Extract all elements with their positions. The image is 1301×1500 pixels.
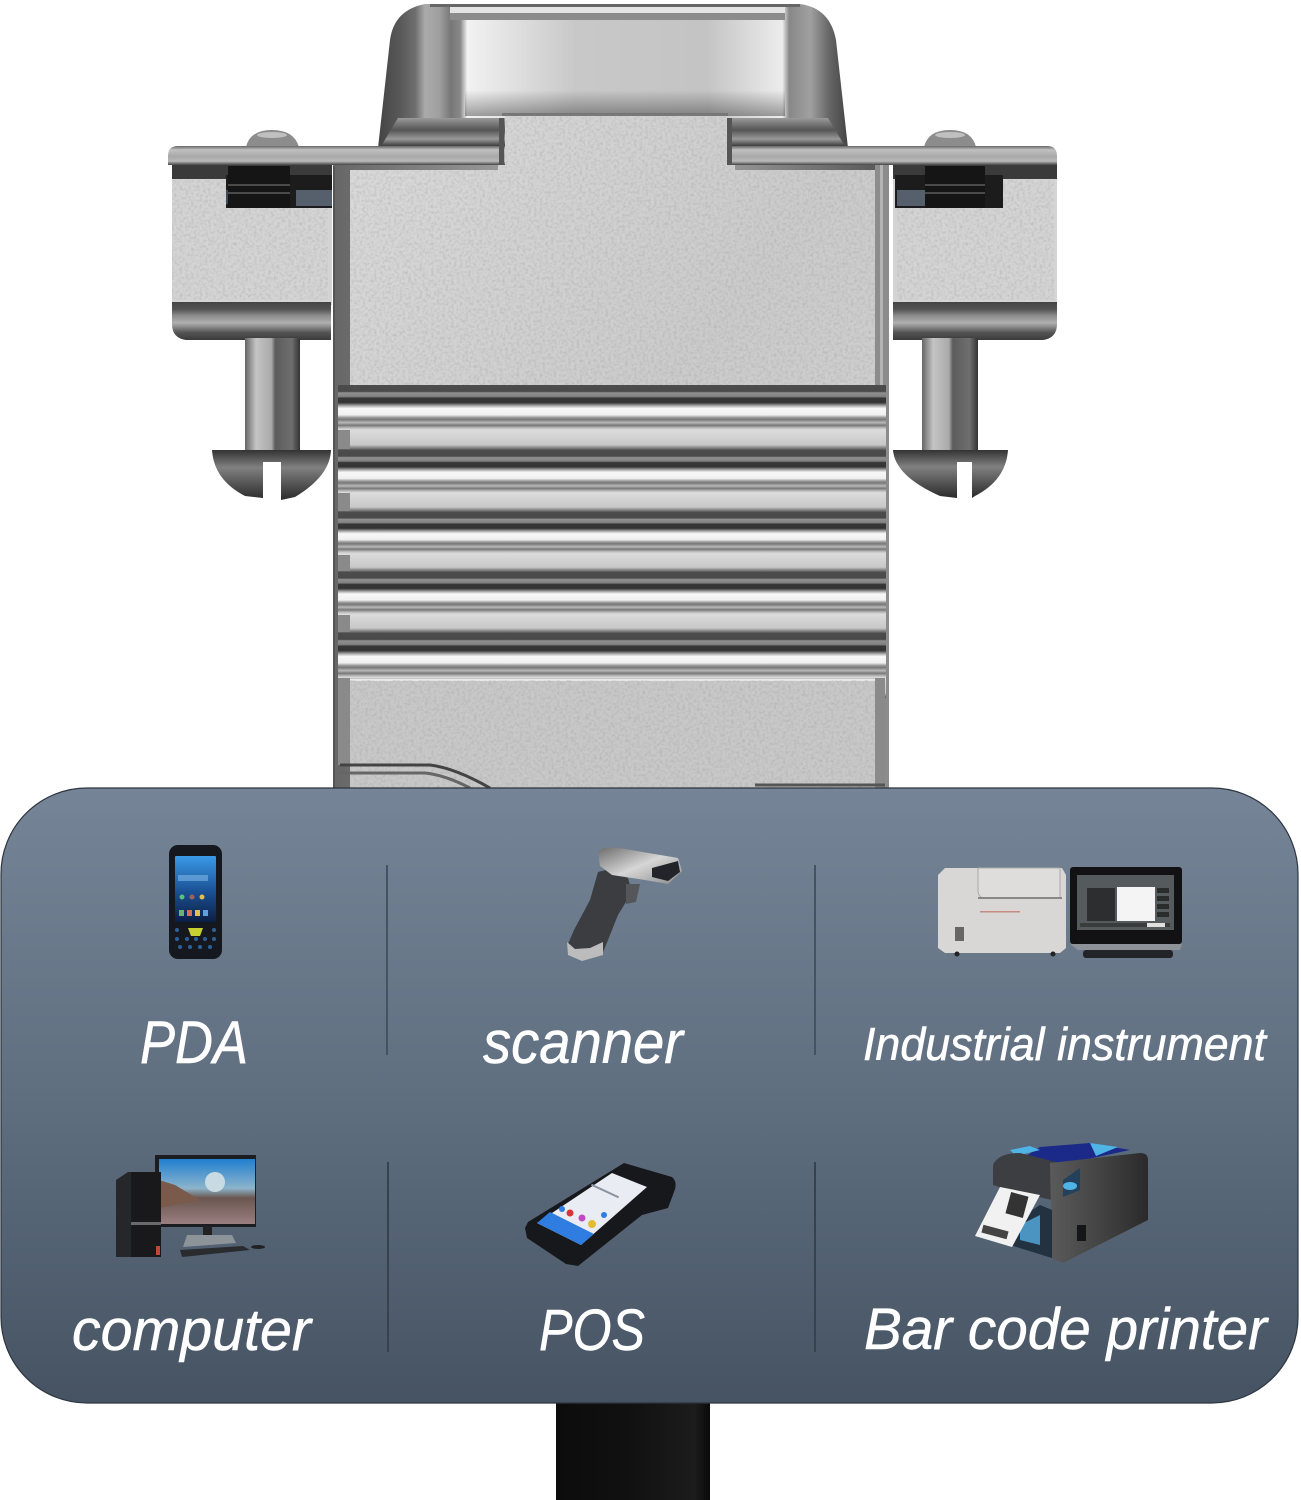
base embossed curve [340,765,885,788]
flange plate [168,146,1057,165]
label: PDA: PDA [140,1009,248,1076]
icon: bar code printer [975,1143,1148,1263]
cooling ribs [338,385,886,790]
left screw pin [212,338,331,500]
connector shell top [378,4,848,148]
metal D-sub connector [168,4,1060,790]
screw heads on flange [246,130,976,147]
icon: PDA handheld [169,845,222,959]
right screw pin [893,338,1008,498]
icon: desktop computer [116,1155,265,1257]
left side block [172,165,332,340]
main body [333,113,889,790]
label: computer: computer [72,1298,314,1363]
label: scanner: scanner [483,1009,685,1076]
surface texture [170,115,1060,790]
label: POS: POS [539,1298,645,1363]
icon: barcode scanner [567,848,682,961]
icon: industrial instrument [938,867,1182,958]
panel: compatible devices [1,788,1298,1403]
icon: POS terminal [525,1163,676,1266]
cable [556,1395,710,1500]
threaded screw shafts [228,166,985,208]
dividers [387,865,815,1352]
right side block [893,165,1057,340]
label: Bar code printer: Bar code printer [864,1297,1270,1362]
label: Industrial instrument: Industrial instrument [863,1018,1268,1070]
